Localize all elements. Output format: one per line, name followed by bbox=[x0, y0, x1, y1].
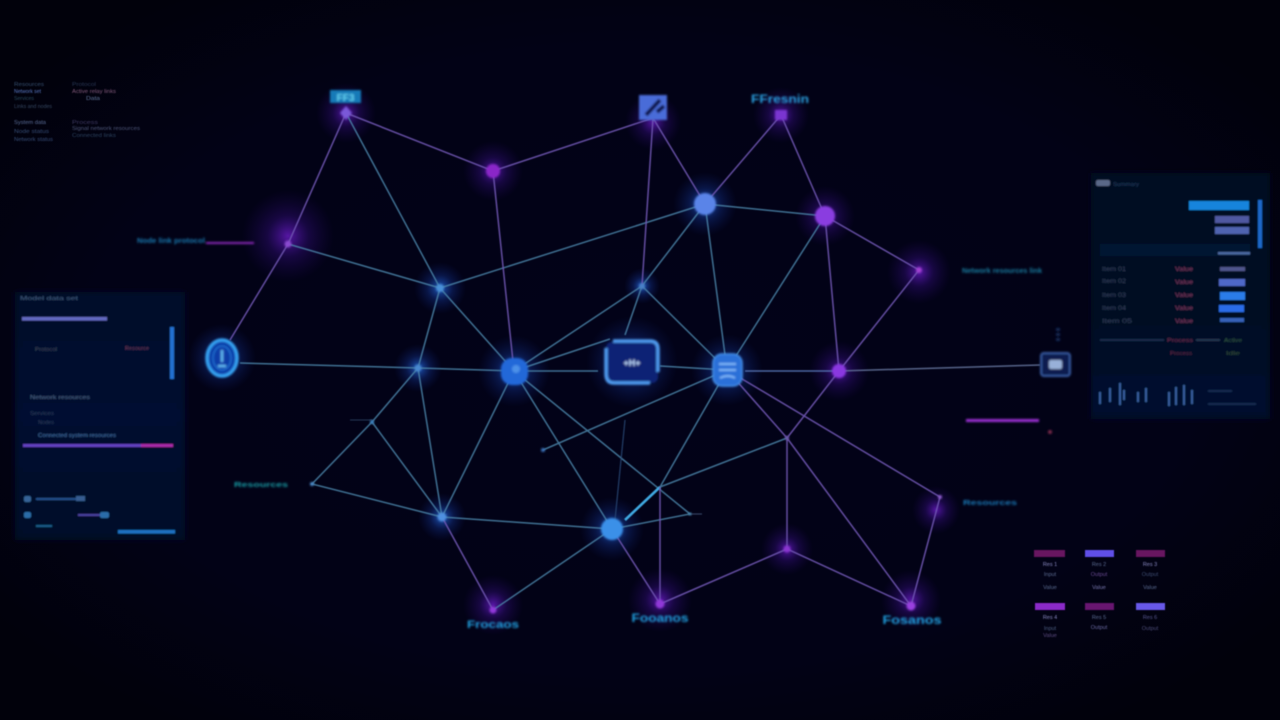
label: right: Network resources link bbox=[962, 266, 1043, 275]
row labels: Nodes bbox=[38, 420, 54, 426]
label with line: left bbox=[137, 236, 254, 245]
label: far lower right: Resources bbox=[963, 498, 1017, 507]
data table: Value bbox=[1175, 306, 1194, 312]
row labels: Resource bbox=[125, 346, 149, 352]
node: top-left bbox=[340, 106, 352, 120]
legend text: top left: Signal network resources bbox=[72, 126, 140, 132]
data table: Item 03 bbox=[1102, 293, 1127, 299]
network edges: purple links bbox=[230, 113, 940, 610]
node: upper blue hub bbox=[694, 193, 716, 215]
legend: colour key grid: Input bbox=[1044, 626, 1057, 632]
legend: colour key grid: Value bbox=[1092, 585, 1106, 591]
data table: Value bbox=[1175, 319, 1194, 325]
legend: colour key grid: Input bbox=[1044, 572, 1057, 578]
scroll indicator bbox=[170, 327, 174, 379]
panel: left data panel bbox=[15, 292, 185, 540]
node: junction bbox=[785, 436, 789, 440]
slider rows bbox=[24, 496, 109, 527]
legend text: top left: Network set bbox=[14, 89, 41, 95]
status rows bbox=[1100, 338, 1242, 357]
legend: colour key grid: Res 1 bbox=[1043, 562, 1057, 568]
data table: Item 01 bbox=[1102, 267, 1127, 273]
status rows: Process bbox=[1167, 338, 1193, 344]
node: far lower right bbox=[938, 495, 942, 499]
node: bottom right bbox=[906, 602, 916, 610]
callout: magenta bar bbox=[966, 419, 1052, 434]
legend: colour key grid: Res 4 bbox=[1043, 615, 1057, 621]
data table: Item 05 bbox=[1102, 319, 1133, 325]
node: small blue left bbox=[414, 364, 422, 372]
gradient bar: middle bbox=[23, 444, 173, 447]
node: left purple bbox=[284, 240, 292, 248]
legend: colour key grid: Output bbox=[1091, 572, 1108, 578]
legend text: top left: Resources bbox=[14, 82, 44, 88]
node: lower purple bbox=[784, 546, 790, 552]
row labels: Connected system resources bbox=[38, 433, 116, 439]
icon: central chip bbox=[606, 341, 658, 383]
legend text: top left: Node status bbox=[14, 129, 49, 135]
panel: right data panel bbox=[1091, 173, 1270, 419]
data table: Value bbox=[1175, 280, 1194, 286]
label: bottom right: Fosanos bbox=[882, 613, 942, 627]
legend text: top left: Connected links bbox=[72, 133, 116, 139]
panel heading bbox=[1096, 180, 1139, 188]
legend: colour key grid: Res 3 bbox=[1143, 562, 1157, 568]
legend: colour key grid: Value bbox=[1043, 633, 1057, 639]
row labels: Protocol bbox=[35, 347, 57, 353]
data table: Item 04 bbox=[1102, 306, 1127, 312]
icon: far right device bbox=[1041, 328, 1070, 376]
legend text: top left: System data bbox=[14, 120, 47, 126]
label: top-left node bbox=[330, 90, 361, 104]
node glows bbox=[188, 83, 960, 635]
data table: Value bbox=[1175, 267, 1194, 273]
legend text: top left bbox=[14, 82, 140, 143]
icon: central chip: +H+ bbox=[623, 358, 641, 368]
node: small centre bbox=[541, 448, 545, 452]
node: arrow end bbox=[688, 512, 692, 516]
row labels: Network resources bbox=[30, 395, 90, 401]
status rows: Process bbox=[1170, 351, 1192, 357]
panel heading: Summary bbox=[1113, 182, 1139, 188]
data table: Item 02 bbox=[1102, 279, 1127, 285]
mini waveform chart bbox=[1093, 376, 1265, 412]
legend: colour key grid: Output bbox=[1142, 626, 1159, 632]
icon: brain node bbox=[207, 340, 237, 376]
label with line: left: Node link protocol bbox=[137, 236, 205, 245]
node: purple right of hub bbox=[832, 364, 846, 378]
legend text: top left: Services bbox=[14, 96, 34, 102]
label: bottom centre: Fooanos bbox=[632, 611, 689, 625]
node: upper purple bbox=[486, 164, 500, 178]
legend: colour key grid bbox=[1034, 550, 1165, 639]
label: bottom left: Frocaos bbox=[467, 619, 519, 631]
node: lower blue hub bbox=[601, 518, 623, 540]
button bar: bottom bbox=[118, 530, 175, 534]
node: lower-left blue bbox=[438, 512, 446, 522]
legend text: top left: Data bbox=[86, 96, 101, 102]
status rows: Idle bbox=[1226, 351, 1240, 357]
progress bar: top bbox=[22, 317, 107, 320]
summary bars bbox=[1100, 200, 1262, 256]
node: bottom centre bbox=[656, 600, 664, 608]
icon: top centre image tile bbox=[639, 95, 667, 120]
legend text: top left: Active relay links bbox=[72, 89, 116, 95]
panel heading: Model data set bbox=[20, 296, 79, 302]
legend text: top left: Links and nodes bbox=[14, 104, 52, 110]
node: right central hub bbox=[713, 354, 742, 386]
node and label: far lower-left bbox=[234, 480, 314, 489]
label: top-left node: FF3 bbox=[337, 93, 355, 104]
node: small blue upper-left bbox=[436, 284, 444, 292]
status rows: Active bbox=[1224, 338, 1242, 344]
node: small blue centre bbox=[639, 283, 645, 289]
row labels: Services bbox=[30, 411, 54, 417]
node: small lower-left bbox=[370, 420, 374, 424]
node: right purple bbox=[916, 267, 922, 273]
legend: colour key grid: Res 5 bbox=[1092, 615, 1106, 621]
legend: colour key grid: Value bbox=[1143, 585, 1157, 591]
legend: colour key grid: Res 6 bbox=[1143, 615, 1157, 621]
node: top-right bbox=[775, 110, 787, 120]
legend text: top left: Process bbox=[72, 120, 98, 126]
legend: colour key grid: Output bbox=[1091, 625, 1108, 631]
data table bbox=[1102, 267, 1245, 325]
legend: colour key grid: Output bbox=[1142, 572, 1159, 578]
label: top-right node: FFresnin bbox=[751, 94, 809, 106]
node: upper right purple bbox=[815, 206, 835, 226]
node: left central hub bbox=[501, 358, 528, 385]
node and label: far lower-left: Resources bbox=[234, 480, 288, 489]
legend text: top left: Network status bbox=[14, 137, 53, 143]
data table: Value bbox=[1175, 293, 1194, 299]
legend: colour key grid: Res 2 bbox=[1092, 562, 1106, 568]
node: bottom left bbox=[490, 606, 496, 614]
legend text: top left: Protocol bbox=[72, 82, 96, 88]
legend: colour key grid: Value bbox=[1043, 585, 1057, 591]
network edges: blue links bbox=[240, 113, 1040, 610]
row labels bbox=[30, 346, 149, 439]
